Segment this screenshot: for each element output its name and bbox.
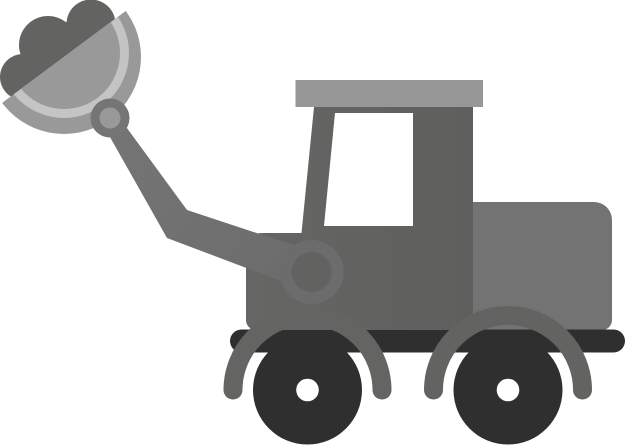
axle bar [230, 330, 625, 352]
cab window [324, 113, 413, 226]
cab roof [296, 80, 483, 107]
front wheel [253, 336, 362, 444]
rear fender [434, 316, 582, 390]
rear wheel [454, 336, 562, 444]
bucket [0, 0, 141, 134]
coal load [0, 0, 116, 100]
cab and main body [246, 107, 473, 330]
arm pivot [280, 240, 344, 304]
bucket pivot [90, 98, 130, 138]
front fender [233, 316, 382, 390]
rear compartment [465, 202, 612, 330]
loader arm [106, 124, 293, 281]
